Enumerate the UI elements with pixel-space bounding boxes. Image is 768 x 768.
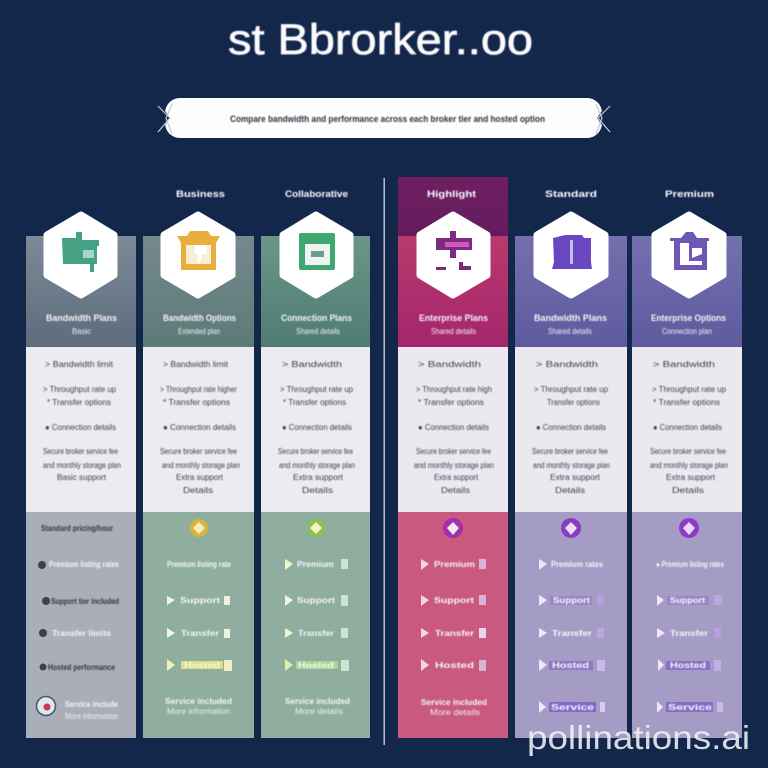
pricing list: Hosted <box>435 661 474 670</box>
subtitle banner: Compare bandwidth and performance across each broker tier and hosted option <box>230 114 545 124</box>
column label: Highlight <box>427 189 476 199</box>
feature list: * Transfer options <box>418 398 484 407</box>
features panel <box>632 347 742 512</box>
features panel <box>143 347 254 512</box>
feature list: * Transfer options <box>163 398 230 407</box>
pricing list: Transfer <box>298 629 334 638</box>
feature list <box>532 360 610 495</box>
badge and note <box>36 696 118 721</box>
feature list: * Transfer options <box>47 398 111 407</box>
column 3 <box>261 189 370 738</box>
header band <box>632 236 742 347</box>
plan name: Connection plan <box>662 327 712 336</box>
feature list: ● Connection details <box>418 423 489 432</box>
hexagon icon <box>47 215 114 295</box>
pricing list: Service <box>668 703 713 712</box>
feature list: and monthly storage plan <box>533 461 610 470</box>
feature list: > Throughput rate high <box>416 385 492 394</box>
feature list: Details <box>183 486 213 495</box>
lower panel <box>632 512 742 738</box>
feature list <box>43 360 121 482</box>
plan name: Bandwidth Options <box>163 313 236 323</box>
features panel <box>515 347 627 512</box>
badge and note: More information <box>65 712 118 721</box>
lower panel <box>26 512 136 738</box>
header band <box>398 236 508 347</box>
plan name: Enterprise Options <box>651 313 726 323</box>
feature list: and monthly storage plan <box>279 461 355 470</box>
plan name <box>46 313 117 336</box>
header band <box>26 236 136 347</box>
feature list: ● Connection details <box>282 423 352 432</box>
pricing list: Premium listing rates <box>49 560 119 569</box>
pricing list: Hosted <box>670 661 706 670</box>
feature list: Details <box>302 486 333 495</box>
column label: Standard <box>545 189 597 199</box>
header band <box>261 236 370 347</box>
feature list: Secure broker service fee <box>278 447 353 456</box>
plan name: Extended plan <box>178 327 220 336</box>
pricing list: More details <box>295 707 343 716</box>
pricing list: Hosted <box>298 661 334 670</box>
feature list: > Throughput rate up <box>534 385 609 394</box>
plan name <box>651 313 726 336</box>
feature list: and monthly storage plan <box>650 461 728 470</box>
feature list: ● Connection details <box>536 423 606 432</box>
feature list: > Throughput rate up <box>280 385 354 394</box>
features panel <box>398 347 508 512</box>
feature list: Extra support <box>434 473 479 482</box>
column 2 <box>143 189 254 738</box>
plan name: Enterprise Plans <box>419 313 488 323</box>
pricing list: Support <box>670 596 705 605</box>
feature list: Transfer options <box>547 398 600 407</box>
feature list: Details <box>441 486 470 495</box>
plan name: Shared details <box>296 327 340 336</box>
title: st Bbrorker..oo <box>228 16 533 64</box>
plan name <box>281 313 352 336</box>
feature list: * Transfer options <box>283 398 346 407</box>
pricing list: Premium rates <box>551 560 604 569</box>
feature list: > Throughput rate higher <box>160 385 237 394</box>
pricing list: Premium listing rate <box>167 560 231 569</box>
pricing list <box>539 518 605 713</box>
pricing list: Service included <box>285 697 350 706</box>
feature list: Basic support <box>57 473 107 482</box>
pricing list: Premium <box>434 560 475 569</box>
feature list: Details <box>672 486 704 495</box>
feature list: > Bandwidth <box>282 360 342 369</box>
pricing list: Hosted <box>184 661 220 670</box>
feature list <box>414 360 494 495</box>
hexagon icon <box>655 215 723 295</box>
feature list: Secure broker service fee <box>160 447 237 456</box>
column 6 <box>632 189 742 738</box>
feature list: > Bandwidth <box>536 360 598 369</box>
highlight tab <box>398 177 508 236</box>
column label: Collaborative <box>285 189 348 199</box>
pricing list: Support <box>553 596 590 605</box>
subtitle banner <box>158 98 610 138</box>
hexagon icon <box>537 215 605 295</box>
header band <box>515 236 627 347</box>
pricing list: Transfer limits <box>52 629 112 638</box>
pricing list: Transfer <box>435 629 474 638</box>
pricing list <box>38 524 119 672</box>
pricing list: Transfer <box>670 629 708 638</box>
pricing list: Service included <box>165 697 232 706</box>
plan name <box>163 313 236 336</box>
feature list: * Transfer options <box>653 398 720 407</box>
feature list: ● Connection details <box>163 423 236 432</box>
plan name: Bandwidth Plans <box>534 313 607 323</box>
center divider <box>384 178 385 745</box>
pricing list <box>656 518 724 713</box>
feature list: Details <box>555 486 585 495</box>
watermark: pollinations.ai <box>527 719 750 756</box>
pricing list <box>421 518 487 717</box>
plan name: Connection Plans <box>281 313 352 323</box>
hexagon icon <box>164 215 232 295</box>
feature list: Secure broker service fee <box>532 447 608 456</box>
lower panel <box>261 512 370 738</box>
pricing list: Hosted <box>552 661 589 670</box>
feature list: Extra support <box>666 473 716 482</box>
pricing list: More information <box>167 707 230 716</box>
pricing list: ▸ Premium listing rates <box>656 560 724 569</box>
feature list <box>160 360 240 495</box>
pricing list: Support <box>297 596 335 605</box>
feature list <box>278 360 355 495</box>
pricing list: Premium <box>297 560 334 569</box>
feature list: Extra support <box>550 473 601 482</box>
feature list: Extra support <box>293 473 344 482</box>
feature list: and monthly storage plan <box>162 461 240 470</box>
feature list: and monthly storage plan <box>43 461 121 470</box>
lower panel <box>143 512 254 738</box>
badge and note: Service include <box>65 700 118 709</box>
pricing list: More details <box>430 708 480 717</box>
feature list: > Bandwidth <box>653 360 715 369</box>
pricing list: Service <box>551 703 595 712</box>
feature list: ● Connection details <box>653 423 722 432</box>
feature list: ● Connection details <box>45 423 116 432</box>
feature list: Secure broker service fee <box>416 447 491 456</box>
column 5 <box>515 189 627 738</box>
hexagon icon <box>283 215 350 295</box>
plan name <box>419 313 488 336</box>
plan name: Shared details <box>431 327 476 336</box>
pricing list: Support <box>434 596 474 605</box>
hexagon icon <box>420 215 487 295</box>
column 4 <box>398 177 508 738</box>
pricing list: Support tier included <box>51 597 119 606</box>
pricing list: Standard pricing/hour <box>41 524 113 533</box>
pricing list <box>285 519 350 716</box>
feature list: > Bandwidth limit <box>163 360 229 369</box>
plan name <box>534 313 607 336</box>
feature list: > Bandwidth <box>418 360 481 369</box>
feature list: > Throughput rate up <box>43 385 117 394</box>
pricing list <box>165 519 232 716</box>
plan name: Shared details <box>548 327 592 336</box>
lower panel <box>398 512 508 738</box>
feature list: > Throughput rate up <box>652 385 727 394</box>
feature list: Secure broker service fee <box>650 447 726 456</box>
feature list: Extra support <box>176 473 224 482</box>
feature list <box>650 360 728 495</box>
header band <box>143 236 254 347</box>
pricing list: Support <box>180 596 220 605</box>
feature list: Secure broker service fee <box>43 447 118 456</box>
column label: Premium <box>665 189 714 199</box>
lower panel <box>515 512 627 738</box>
feature list: > Bandwidth limit <box>45 360 114 369</box>
pricing list: Transfer <box>181 629 219 638</box>
pricing list: Hosted performance <box>48 663 115 672</box>
plan name: Basic <box>72 327 91 336</box>
feature list: and monthly storage plan <box>414 461 494 470</box>
column label: Business <box>176 189 225 199</box>
plan name: Bandwidth Plans <box>46 313 117 323</box>
pricing list: Transfer <box>552 629 592 638</box>
column 1 <box>26 215 136 738</box>
pricing list: Service included <box>421 698 487 707</box>
features panel <box>261 347 370 512</box>
features panel <box>26 347 136 512</box>
